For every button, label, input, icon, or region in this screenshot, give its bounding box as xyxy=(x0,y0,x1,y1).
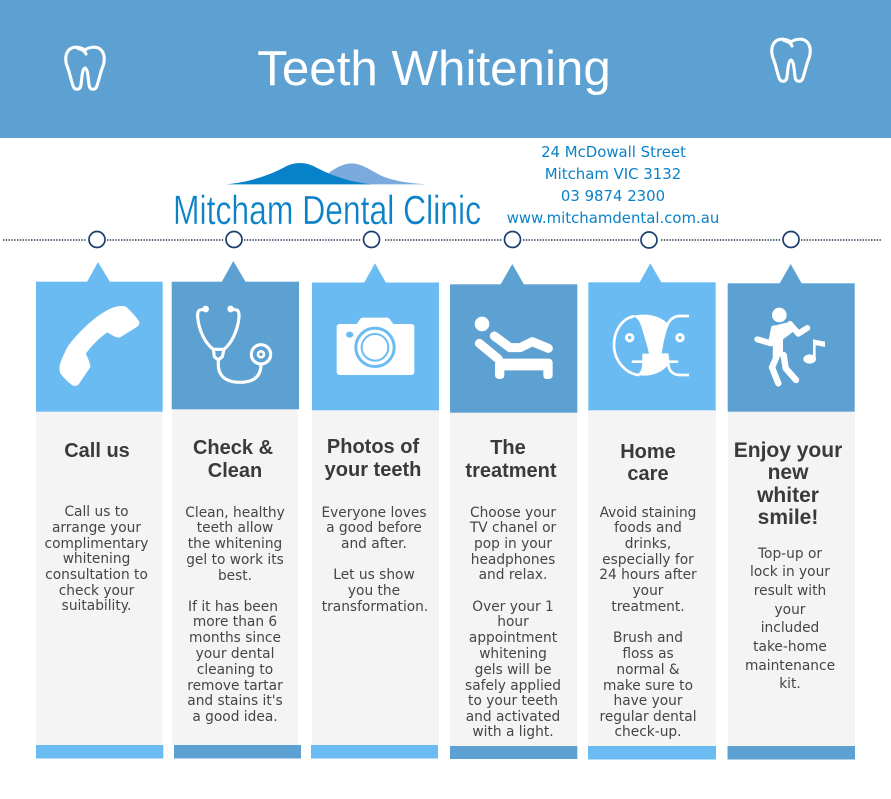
body text: drinks, xyxy=(625,536,671,552)
contact details: Mitcham VIC 3132 xyxy=(545,165,681,183)
contact details: 24 McDowall Street xyxy=(541,143,686,161)
body text: the whitening xyxy=(188,536,282,552)
icon: two faces xyxy=(614,315,689,376)
panel: enjoy your new smile xyxy=(728,264,855,760)
body text: regular dental xyxy=(599,709,697,725)
contact details xyxy=(507,143,719,227)
body text: gels will be xyxy=(475,662,551,678)
icon: camera xyxy=(337,318,414,375)
icon: person reclining xyxy=(475,317,553,379)
body text: Top-up or xyxy=(757,546,822,562)
body text: you the xyxy=(348,583,400,599)
body text: and activated xyxy=(466,709,560,725)
body text: whitening xyxy=(479,646,547,662)
heading: care xyxy=(627,463,669,485)
heading xyxy=(325,436,421,481)
body text: a good before xyxy=(326,520,422,536)
body text: treatment. xyxy=(611,599,685,615)
body text: check your xyxy=(59,583,135,599)
body text: a good idea. xyxy=(192,709,278,725)
panel: check and clean xyxy=(172,261,301,758)
body text: headphones xyxy=(471,552,555,568)
heading: new xyxy=(768,461,809,484)
body text: maintenance xyxy=(745,658,835,674)
heading: whiter xyxy=(756,484,819,507)
icon: dancing person and music note xyxy=(757,308,825,383)
body text: with a light. xyxy=(472,724,554,740)
body text: and relax. xyxy=(479,567,547,583)
body text: safely applied xyxy=(465,678,561,694)
heading xyxy=(193,437,273,482)
logo: Mitcham Dental Clinic: Mitcham Dental Clinic xyxy=(173,187,481,233)
body text: floss as xyxy=(622,646,674,662)
panel: call us xyxy=(36,262,163,758)
body text: hour xyxy=(497,614,529,630)
body text: best. xyxy=(218,568,252,584)
body text: teeth allow xyxy=(197,520,273,536)
panel: home care xyxy=(588,263,716,760)
logo: Mitcham Dental Clinic xyxy=(173,163,481,233)
heading xyxy=(465,437,557,482)
body text xyxy=(745,546,835,692)
body text: result with xyxy=(754,583,826,599)
body text: arrange your xyxy=(52,520,141,536)
heading: smile! xyxy=(758,506,818,529)
body text: Brush and xyxy=(613,630,683,646)
body text: more than 6 xyxy=(193,614,277,630)
body text: make sure to xyxy=(603,678,693,694)
body text: Everyone loves xyxy=(321,505,427,521)
body text: your xyxy=(633,583,664,599)
body text: included xyxy=(761,620,819,636)
body text xyxy=(321,505,428,615)
body text: especially for xyxy=(602,552,694,568)
body text: TV chanel or xyxy=(469,520,556,536)
body text: and stains it's xyxy=(187,693,283,709)
body text: months since xyxy=(189,630,281,646)
contact details: www.mitchamdental.com.au xyxy=(507,209,719,227)
body text: consultation to xyxy=(45,567,148,583)
body text: cleaning to xyxy=(197,662,273,678)
body text: pop in your xyxy=(474,536,552,552)
body text xyxy=(599,505,697,740)
body text: take-home xyxy=(753,639,827,655)
heading: your teeth xyxy=(325,459,421,481)
heading: Enjoy your xyxy=(734,439,842,462)
body text: transformation. xyxy=(322,599,428,615)
body text: your dental xyxy=(196,646,274,662)
title: Teeth Whitening xyxy=(257,41,611,96)
body text: foods and xyxy=(614,520,682,536)
body text: Clean, healthy xyxy=(185,505,285,521)
body text: kit. xyxy=(779,676,801,692)
body text: your xyxy=(775,602,806,618)
timeline xyxy=(3,232,881,248)
body text xyxy=(465,505,561,740)
body text: check-up. xyxy=(614,724,682,740)
heading: Clean xyxy=(208,460,262,482)
body text: Let us show xyxy=(333,567,415,583)
body text: appointment xyxy=(469,630,558,646)
icon: tooth right xyxy=(772,39,810,81)
body text: Avoid staining xyxy=(600,505,696,521)
icon: phone xyxy=(60,307,139,385)
heading xyxy=(620,441,676,485)
heading xyxy=(734,439,842,529)
heading: Photos of xyxy=(327,436,419,458)
heading: Check & xyxy=(193,437,273,459)
icon: stethoscope xyxy=(198,306,271,382)
heading: treatment xyxy=(465,460,557,482)
body text: whitening xyxy=(63,551,130,567)
heading: Call us xyxy=(64,440,130,462)
panel: photos of your teeth xyxy=(311,263,439,758)
body text: suitability. xyxy=(62,598,131,614)
contact details: 03 9874 2300 xyxy=(561,187,665,205)
body text: lock in your xyxy=(750,564,830,580)
body text: have your xyxy=(613,693,683,709)
body text: Call us to xyxy=(64,504,129,520)
body text: If it has been xyxy=(188,599,278,615)
panel: the treatment xyxy=(450,264,577,759)
body text: complimentary xyxy=(45,536,148,552)
header banner xyxy=(0,0,891,138)
heading: The xyxy=(490,437,526,459)
body text: Over your 1 xyxy=(472,599,554,615)
body text: gel to work its xyxy=(186,552,284,568)
heading: Home xyxy=(620,441,676,463)
body text xyxy=(45,504,148,614)
body text: 24 hours after xyxy=(599,567,697,583)
body text: and after. xyxy=(341,536,407,552)
body text xyxy=(185,505,285,725)
body text: Choose your xyxy=(470,505,556,521)
body text: to your teeth xyxy=(468,693,558,709)
body text: remove tartar xyxy=(187,678,283,694)
icon: tooth left xyxy=(66,47,104,89)
body text: normal & xyxy=(616,662,680,678)
